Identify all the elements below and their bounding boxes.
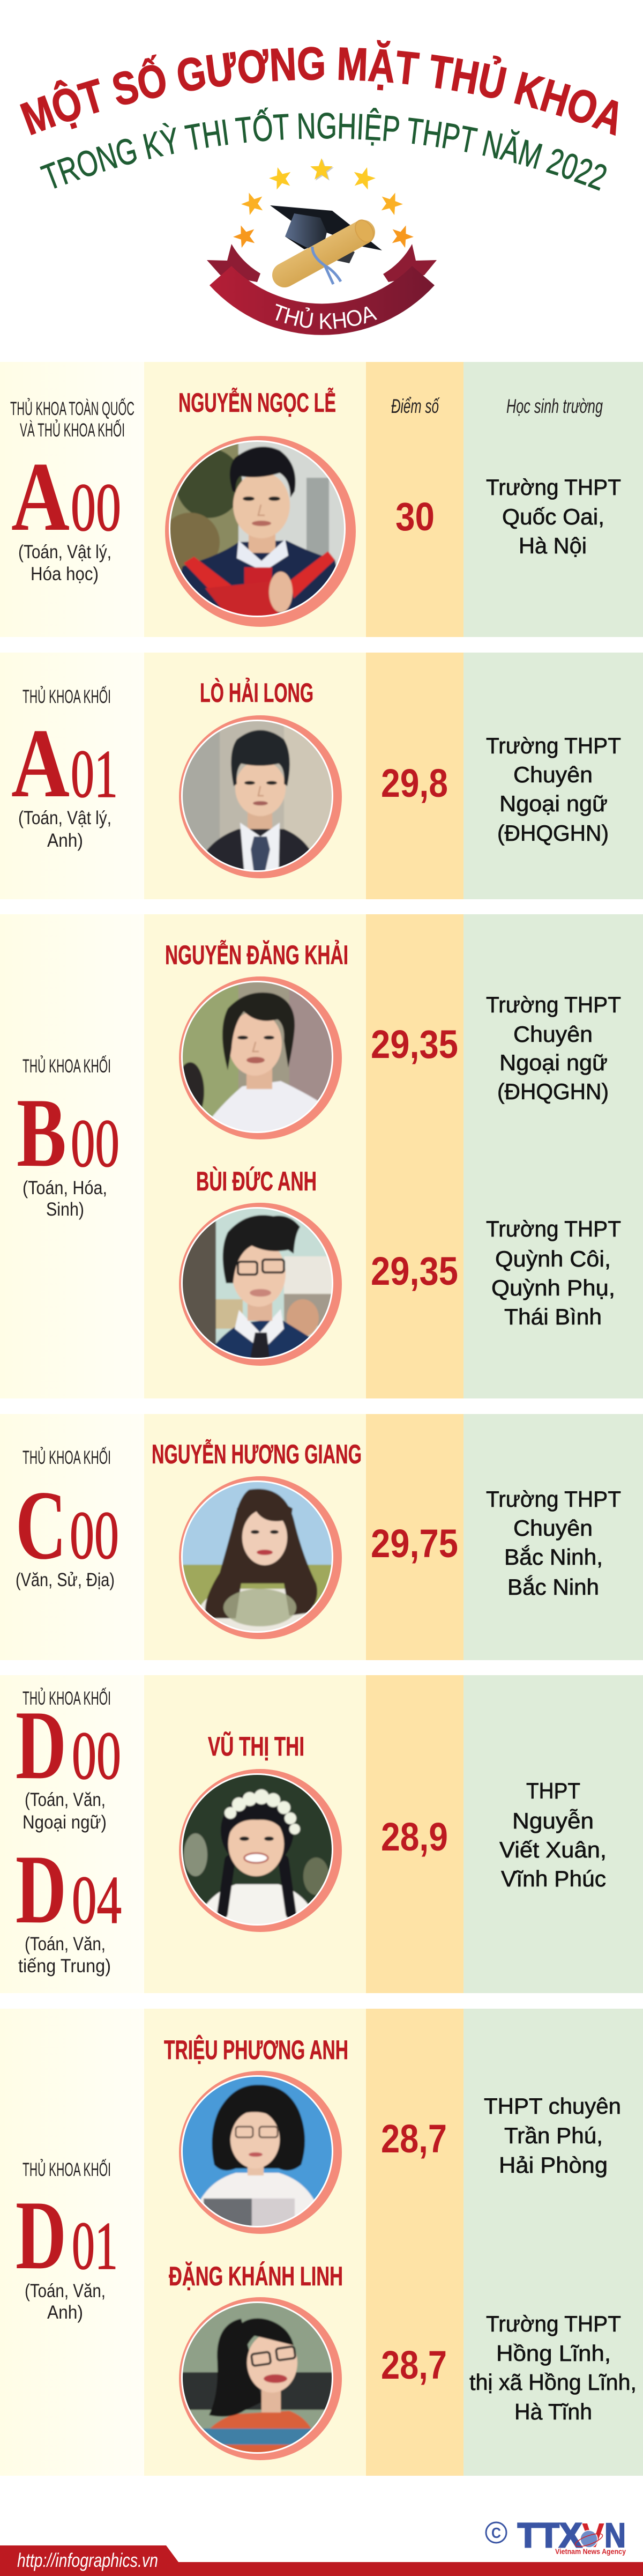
heading: block D04: D [16,1834,66,1944]
heading: block D01: D [16,2180,66,2290]
text: subjects: Anh) [47,830,83,851]
portrait: Bùi Đức Anh [179,1203,342,1366]
heading: block D00: D [16,1690,66,1800]
score: 28,7 [381,2343,447,2387]
score: 29,35 [371,1022,458,1067]
school [469,2311,637,2424]
school: Quỳnh Phụ, [491,1275,615,1300]
icon: seven stars [230,158,416,249]
text: subjects D00 [23,1789,107,1833]
score: 29,75 [371,1521,458,1566]
name: VŨ THỊ THI [208,1731,304,1761]
panel: row A01 [0,653,643,899]
school [486,1216,621,1329]
school: Ngoại ngữ [499,1050,608,1075]
name: NGUYỄN HƯƠNG GIANG [152,1439,362,1469]
icon: TTXVN logo: TTX [518,2516,582,2555]
school: Quốc Oai, [502,504,604,529]
text: subjects: Sinh) [46,1199,84,1220]
panel: row C00 [0,1414,643,1660]
panel: row D00 D04 [0,1675,643,1993]
icon: TTXVN logo [486,2516,626,2556]
score: 29,35 [371,1249,458,1293]
text: subjects [23,1178,107,1220]
school: Chuyên [513,1515,593,1541]
school: Trường THPT [486,2311,621,2336]
text: category label: THỦ KHOA TOÀN QUỐC [10,398,134,419]
heading: block D04 [16,1834,122,1944]
heading: block B00: 00 [71,1106,119,1181]
text: subjects [25,2281,106,2323]
text: category label: VÀ THỦ KHOA KHỐI [20,419,125,441]
school: Hồng Lĩnh, [496,2341,611,2366]
heading: block C00: 00 [70,1498,119,1573]
heading: block A01: A [11,708,70,818]
icon: diploma scroll [285,217,377,284]
heading: block A01 [11,708,118,818]
heading: block D01 [16,2180,118,2290]
heading: block C00: C [16,1470,66,1580]
heading: block D04: 04 [72,1863,122,1938]
icon: TTXVN logo: C [491,2525,501,2541]
text: category label: THỦ KHOA KHỐI [23,2159,111,2180]
school: Trường THPT [486,1216,621,1241]
text: subjects [18,808,111,851]
text: subjects: (Toán, Văn, [25,2281,106,2301]
icon: graduation cap, scroll and ribbon badge [207,158,437,335]
school: Chuyên [513,1021,593,1047]
school [484,2093,621,2178]
title: TRONG KỲ THI TỐT NGHIỆP THPT NĂM 2022 [40,107,607,191]
school: THPT [526,1778,580,1803]
school [486,475,621,558]
school: Thái Bình [504,1304,602,1329]
score: 28,7 [381,2116,447,2161]
name: ĐẶNG KHÁNH LINH [169,2261,343,2291]
school [499,1778,607,1891]
school: THPT chuyên [484,2093,621,2119]
heading: block C00 [16,1470,119,1580]
score: 28,9 [381,1815,448,1859]
footer bar [0,2545,643,2576]
school: Hà Tĩnh [514,2399,592,2424]
icon: TTXVN logo: Vietnam News Agency [555,2547,626,2556]
heading: block A01: 01 [71,737,118,812]
column header: score: Điểm số [391,395,440,417]
heading: block D01: 01 [72,2209,118,2284]
school: Nguyễn [512,1808,594,1833]
text: subjects: Hóa học) [31,564,99,584]
text: subjects: (Văn, Sử, Địa) [16,1570,115,1590]
name: TRIỆU PHƯƠNG ANH [164,2035,348,2065]
school [486,1486,621,1600]
heading: block D00 [16,1690,121,1800]
portrait: Triệu Phương Anh [179,2071,342,2234]
school: Trường THPT [486,992,621,1017]
text: subjects: (Toán, Vật lý, [18,542,111,562]
heading: block B00 [17,1078,119,1187]
school: Trường THPT [486,1486,621,1512]
portrait: Nguyễn Hương Giang [179,1476,342,1639]
text: subjects D00: Ngoại ngữ) [23,1812,107,1833]
text: subjects D00: (Toán, Văn, [25,1789,106,1810]
title [19,40,618,191]
text: category label: THỦ KHOA KHỐI [23,1447,111,1468]
text: category label [10,398,134,441]
school: (ĐHQGHN) [497,1079,609,1104]
portrait: Nguyễn Ngọc Lễ [161,436,356,627]
heading: block A00 [11,442,121,551]
panel: row D01 [0,2009,643,2476]
heading: block A00: 00 [71,470,121,545]
school: thị xã Hồng Lĩnh, [469,2370,637,2395]
heading: block A00: A [11,442,70,551]
icon: ribbon banner [210,266,435,335]
portrait: Nguyễn Đăng Khải [176,976,342,1139]
text: category label: THỦ KHOA KHỐI [23,1055,111,1077]
text: category label: THỦ KHOA KHỐI [23,1687,111,1709]
school [486,992,621,1104]
school: Ngoại ngữ [499,791,608,816]
portrait: Vũ Thị Thi [179,1769,342,1932]
school: Chuyên [513,762,593,787]
icon: ribbon tails [207,244,437,282]
text: category label: THỦ KHOA KHỐI [23,686,111,707]
title: MỘT SỐ GƯƠNG MẶT THỦ KHOA [19,40,618,136]
text: subjects: Anh) [47,2302,83,2323]
panel: row B00 [0,914,643,1398]
school: Viết Xuân, [499,1837,607,1862]
heading: block B00: B [17,1078,66,1187]
name: NGUYỄN ĐĂNG KHẢI [165,940,348,970]
name: LÒ HẢI LONG [200,678,313,708]
score: 30 [395,494,435,539]
school: Trần Phú, [504,2123,603,2148]
name: NGUYỄN NGỌC LỄ [178,388,336,418]
text: subjects D04: tiếng Trung) [18,1956,111,1977]
school: (ĐHQGHN) [497,820,609,846]
school: Trường THPT [486,733,621,758]
icon: ribbon banner: THỦ KHOA [275,304,377,329]
portrait: Lò Hải Long [179,715,342,878]
text: subjects D04: (Toán, Văn, [25,1934,106,1955]
text: subjects: (Toán, Hóa, [23,1178,107,1198]
school: Hà Nội [519,533,587,558]
panel: row A00 [0,362,643,637]
school: Bắc Ninh [507,1574,599,1600]
score: 29,8 [381,761,448,805]
heading: block D00: 00 [72,1719,121,1794]
school: Bắc Ninh, [504,1544,603,1570]
name: BÙI ĐỨC ANH [196,1166,317,1196]
school: Quỳnh Côi, [495,1246,611,1271]
portrait: Đặng Khánh Linh [179,2297,342,2460]
text: subjects: (Toán, Vật lý, [18,808,111,828]
text: subjects D04 [18,1934,111,1977]
school: Trường THPT [486,475,621,500]
footer bar: http://infographics.vn [17,2549,158,2571]
icon: TTXVN logo: V [582,2516,604,2555]
school [486,733,621,846]
school: Vĩnh Phúc [501,1866,606,1891]
icon: TTXVN logo: N [604,2516,626,2555]
school: Hải Phòng [499,2152,608,2178]
icon: graduation cap [270,205,382,263]
text: subjects [18,542,111,584]
